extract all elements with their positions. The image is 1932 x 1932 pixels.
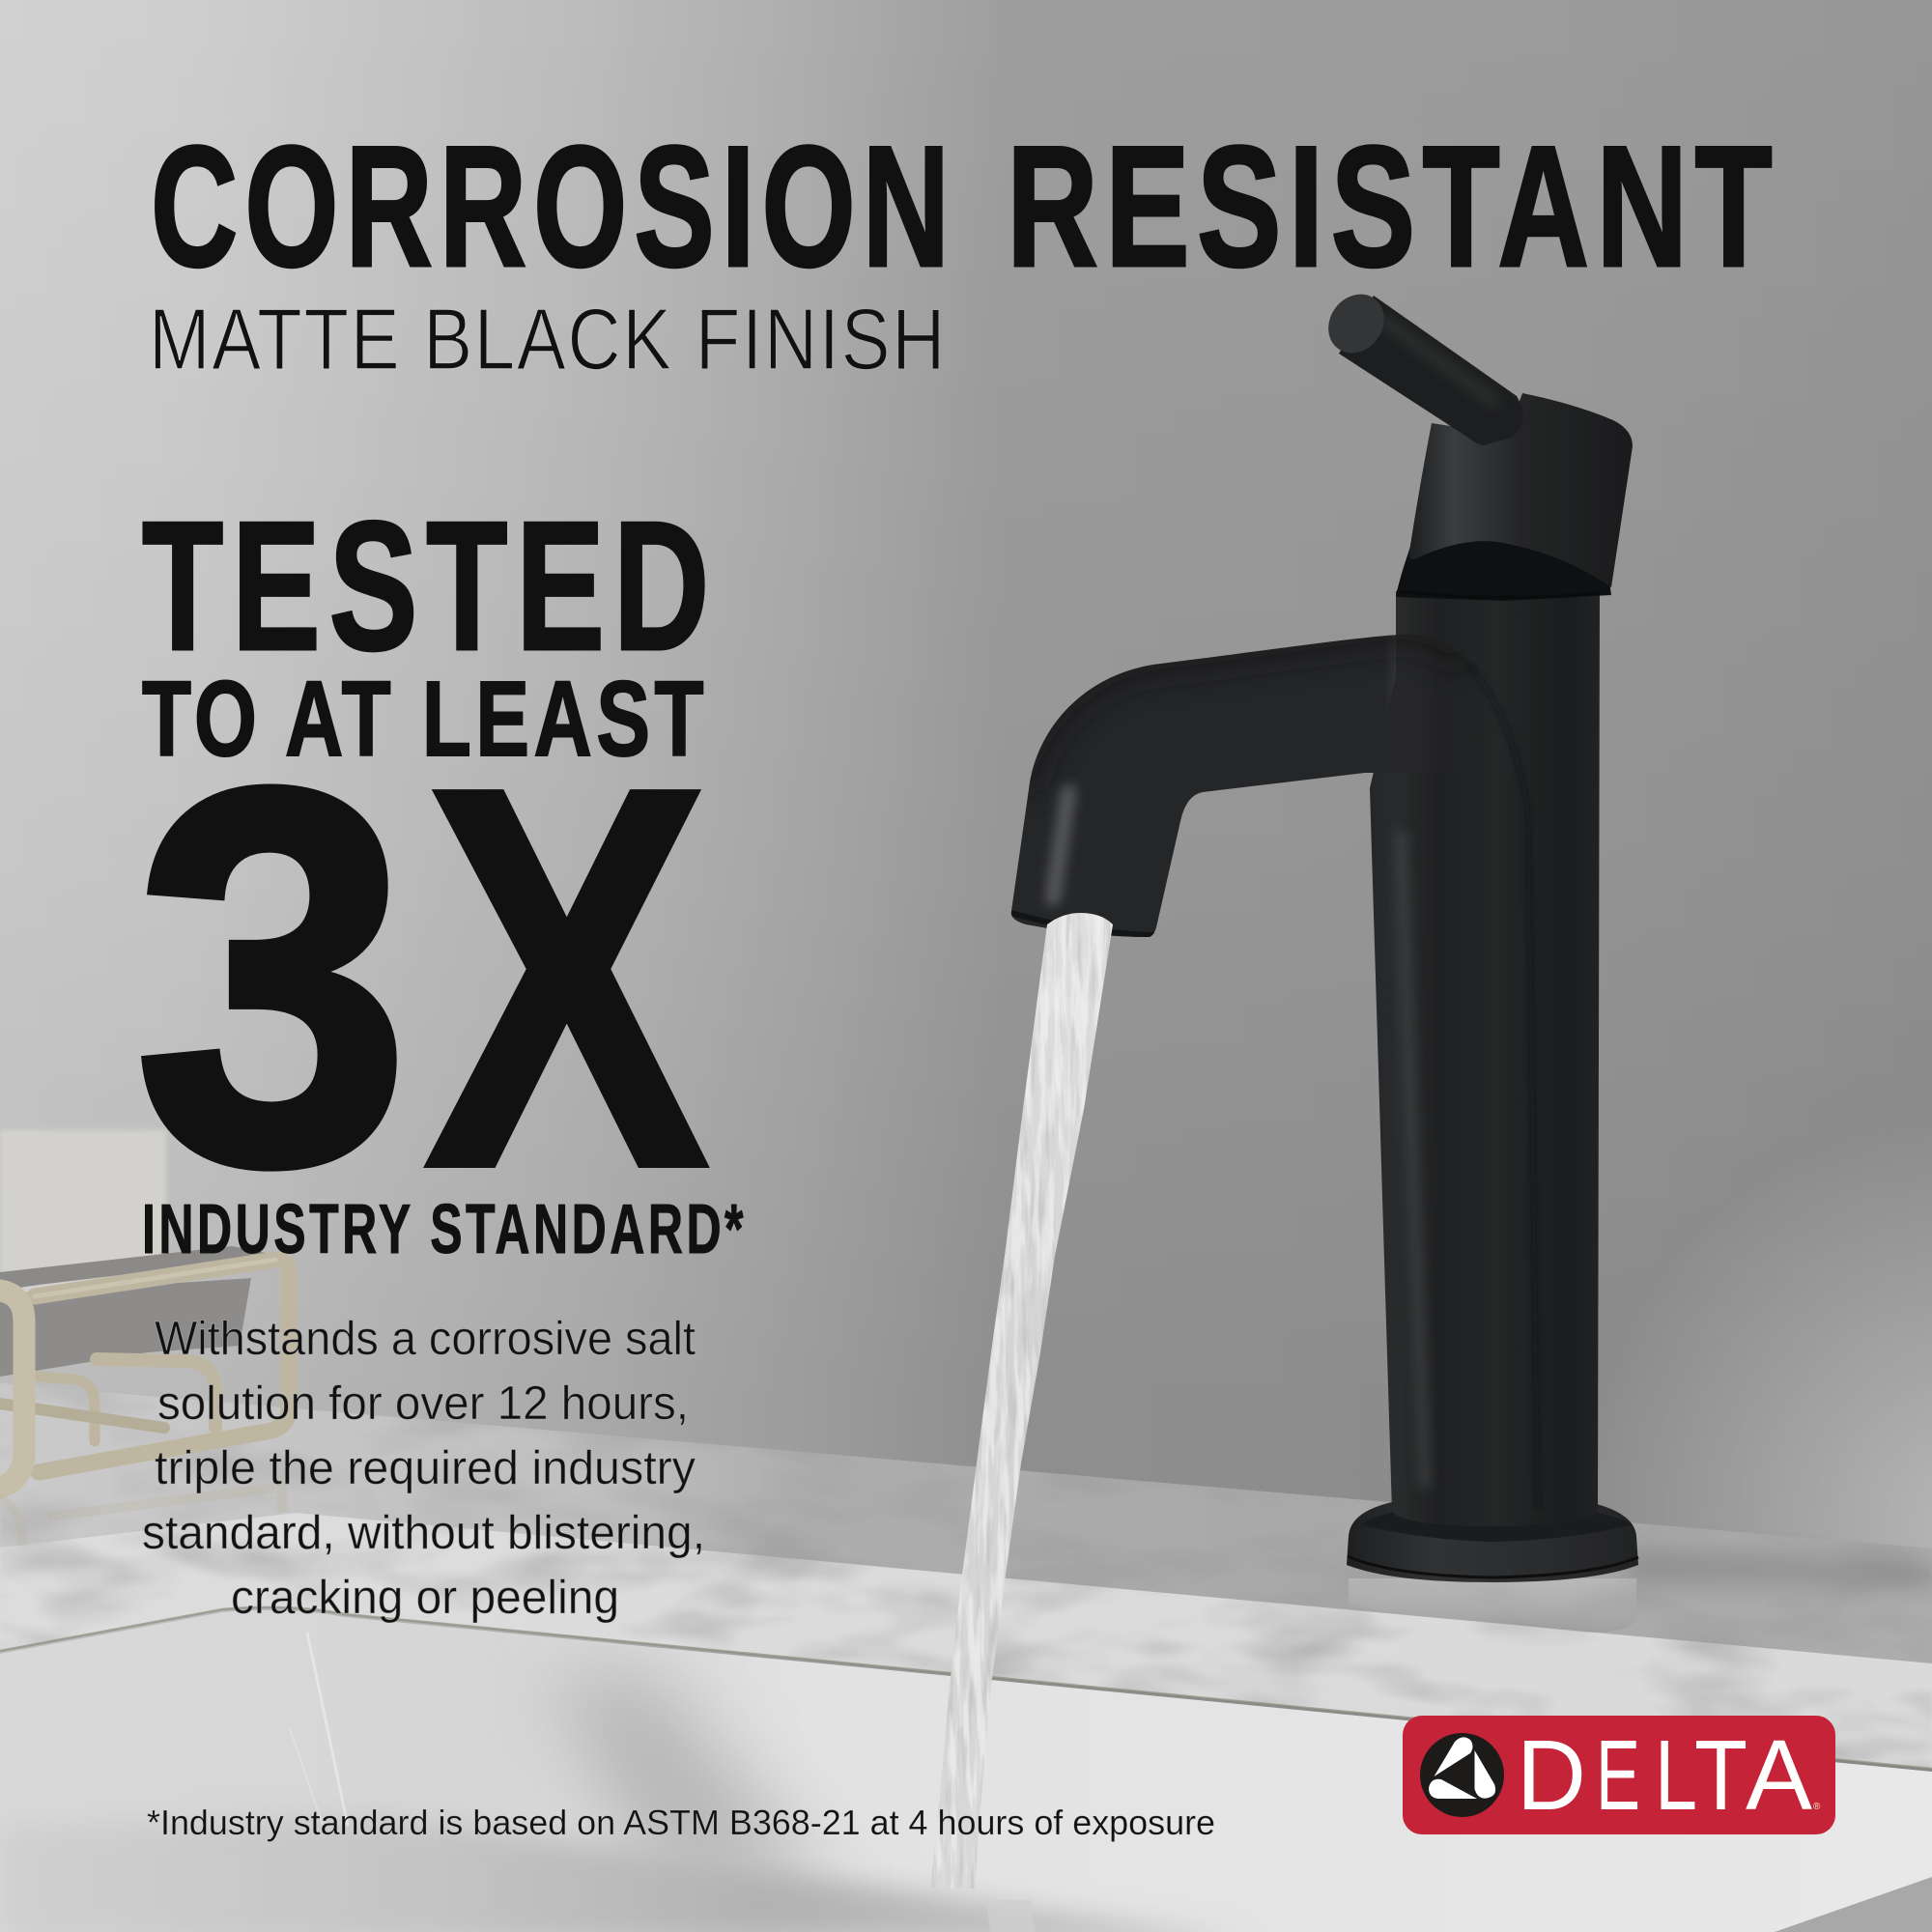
counter front edge bbox=[0, 1507, 1932, 1777]
to at least: TO AT LEAST bbox=[142, 660, 708, 779]
body text: Withstands a corrosive salt bbox=[155, 1313, 696, 1365]
wordmark: L bbox=[1655, 1719, 1697, 1831]
body text: standard, without blistering, bbox=[142, 1507, 705, 1559]
column rim bbox=[1397, 591, 1600, 598]
footnote: *Industry standard is based on ASTM B368-21 at 4 hours of exposure bbox=[147, 1803, 1215, 1842]
subtitle: MATTE BLACK FINISH bbox=[149, 292, 947, 388]
wordmark: T bbox=[1694, 1719, 1747, 1831]
wordmark: E bbox=[1596, 1719, 1640, 1831]
faucet bbox=[1011, 283, 1638, 1633]
faucet shadow on counter bbox=[1623, 1551, 1932, 1586]
handle gap bbox=[1396, 541, 1611, 601]
body text: cracking or peeling bbox=[231, 1572, 619, 1624]
body text: solution for over 12 hours, bbox=[157, 1378, 689, 1430]
spout bbox=[1011, 634, 1478, 937]
heading: tested to at least 3X industry standard bbox=[135, 484, 747, 1279]
industry standard: INDUSTRY STANDARD* bbox=[142, 1191, 747, 1268]
wordmark: D bbox=[1517, 1719, 1586, 1831]
tested: TESTED bbox=[142, 484, 718, 689]
basin bbox=[0, 1610, 1932, 1932]
faucet column bbox=[1370, 591, 1600, 1526]
soap dish bbox=[0, 1246, 289, 1488]
registered mark: ® bbox=[1813, 1802, 1821, 1812]
spout seam bbox=[1468, 665, 1538, 1507]
water stream bbox=[931, 913, 1113, 1930]
soap dish reflection bbox=[0, 1473, 282, 1546]
logo: Delta bbox=[1403, 1716, 1835, 1834]
3X bbox=[135, 677, 710, 1279]
lever bbox=[1317, 283, 1523, 445]
wordmark bbox=[1517, 1719, 1812, 1831]
column highlight bbox=[1401, 831, 1425, 1488]
3X: 3 bbox=[135, 679, 410, 1273]
title: CORROSION bbox=[151, 110, 956, 302]
icon: delta triangle mark bbox=[1420, 1733, 1504, 1817]
body text bbox=[142, 1313, 705, 1624]
spout shading bbox=[1011, 628, 1468, 935]
body text: triple the required industry bbox=[155, 1442, 696, 1494]
countertop surface bbox=[0, 1372, 1932, 1681]
wordmark: A bbox=[1746, 1719, 1812, 1831]
faucet base plate bbox=[1347, 1502, 1638, 1582]
faucet base reflection bbox=[1349, 1578, 1636, 1633]
3X: X bbox=[425, 677, 710, 1279]
handle body bbox=[1409, 393, 1633, 587]
